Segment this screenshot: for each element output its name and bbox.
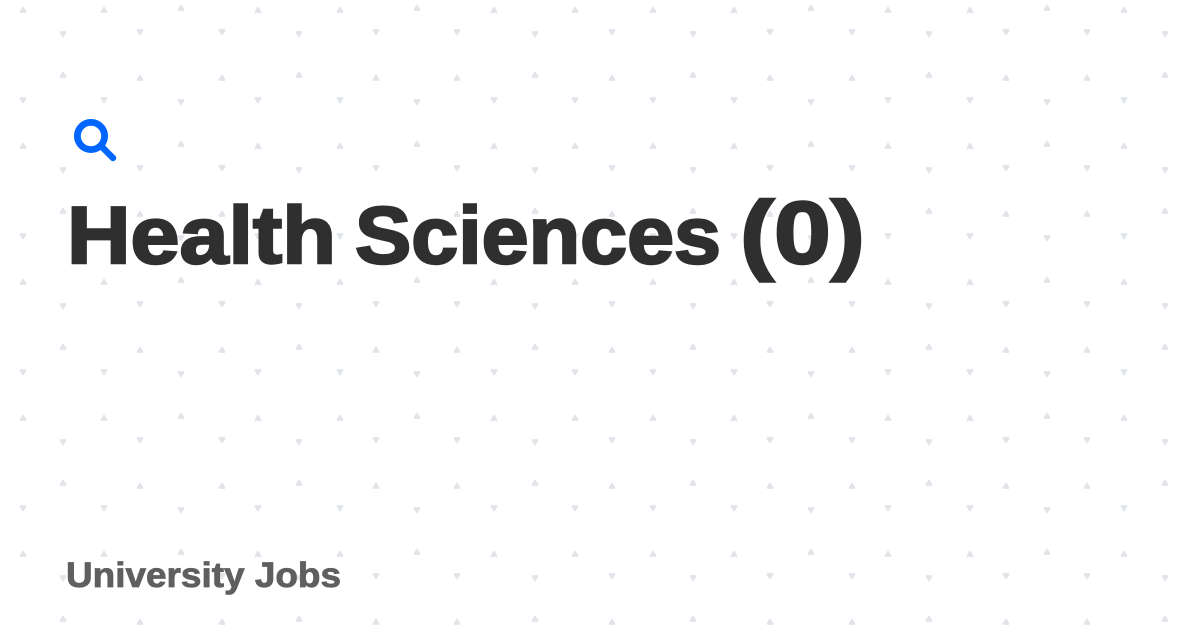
icon: magnifying glass bbox=[77, 122, 113, 158]
title: Sciences bbox=[355, 191, 721, 281]
brand name: University Jobs bbox=[66, 556, 341, 595]
title bbox=[67, 183, 865, 282]
title: (0) bbox=[740, 183, 865, 282]
title: Health bbox=[67, 191, 336, 281]
